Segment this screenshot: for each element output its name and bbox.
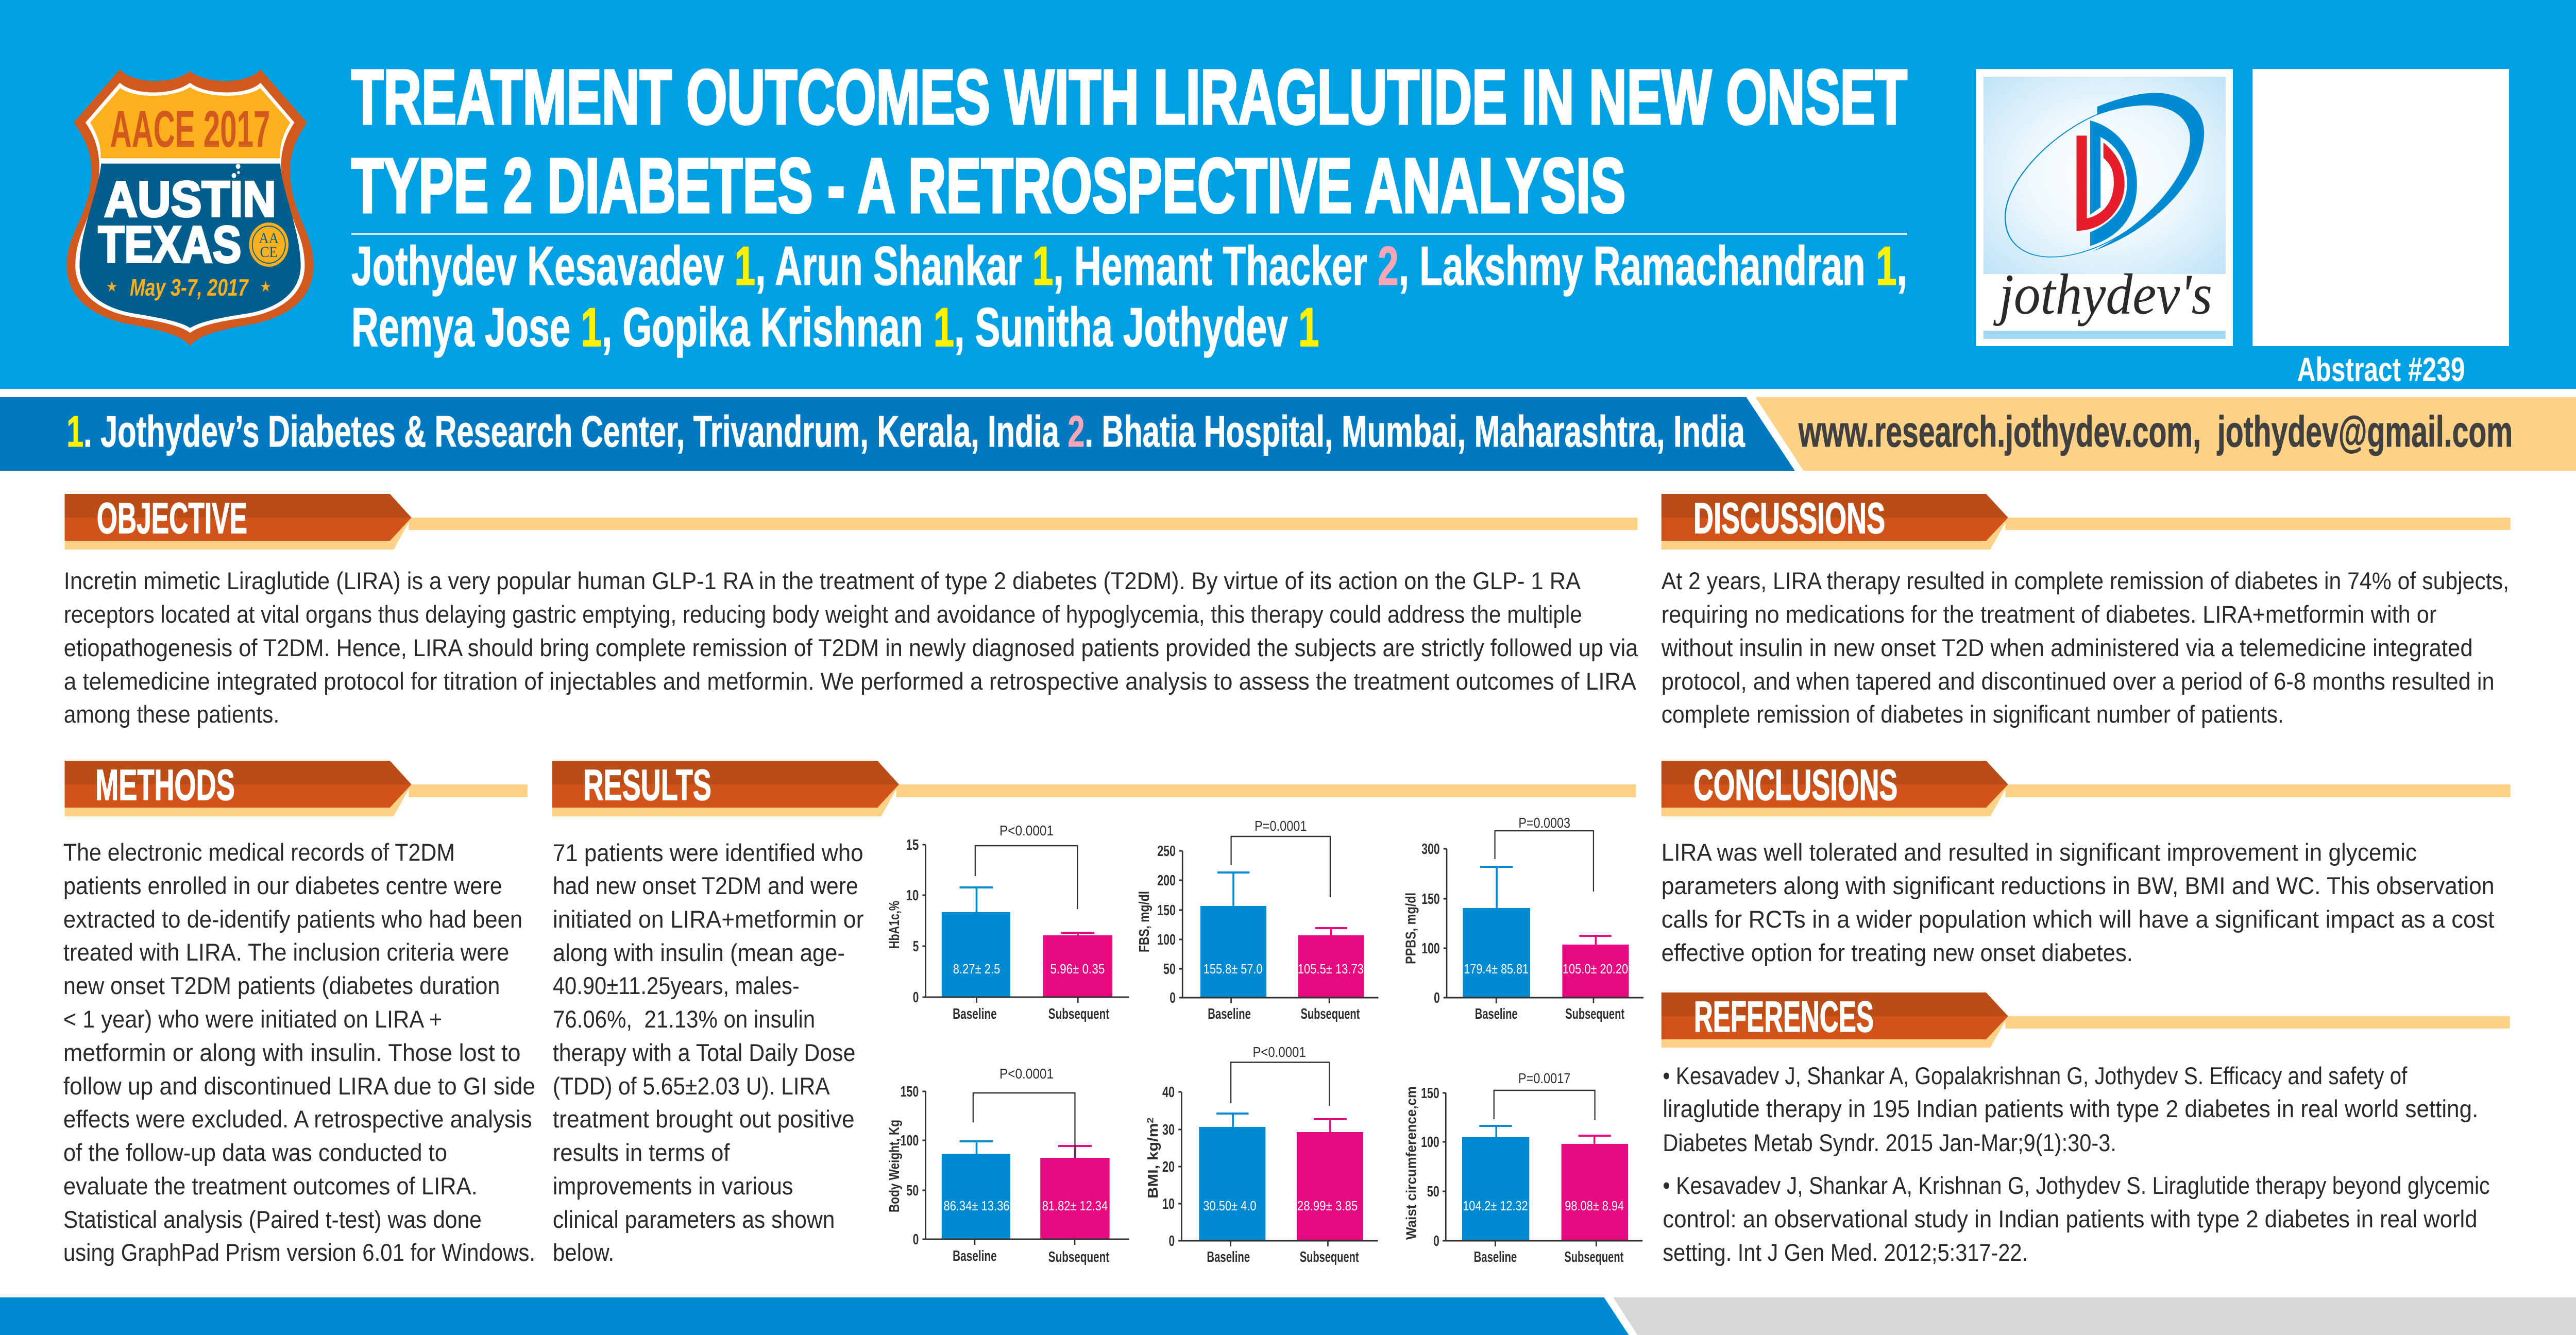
heading: conclusions [1662, 761, 2511, 816]
authors [351, 235, 1907, 358]
text: results [553, 840, 864, 1266]
text: discussions: requiring no medications for the treatment of diabetes. LIRA+metformin with or [1662, 602, 2437, 628]
chart: PPBS: 100 [1421, 940, 1440, 956]
icon: Jothydev's logo: jothydev's [1993, 263, 2212, 326]
title [351, 54, 1907, 229]
authors: Remya Jose 1, Gopika Krishnan 1, Sunitha Jothydev 1 [351, 297, 1319, 358]
text: references: liraglutide therapy in 195 Indian patients with type 2 diabetes in real world setting. [1663, 1096, 2478, 1123]
chart: HbA1c [887, 823, 1129, 1022]
chart: BMI: 30.50± 4.0 [1203, 1199, 1257, 1213]
chart: FBS: 150 [1157, 902, 1176, 918]
text: results: initiated on LIRA+metformin or [553, 906, 864, 933]
text: methods: < 1 year) who were initiated on LIRA + [63, 1006, 442, 1033]
abstract number: Abstract #239 [2297, 351, 2465, 389]
text: methods: of the follow-up data was conducted to [63, 1140, 447, 1167]
chart: waist circumference: Baseline [1474, 1248, 1517, 1265]
heading: conclusions: CONCLUSIONS [1693, 761, 1897, 809]
text: methods [63, 840, 535, 1266]
text: methods: The electronic medical records of T2DM [63, 840, 455, 866]
text: discussions: At 2 years, LIRA therapy resulted in complete remission of diabetes in 74% of subjects, [1662, 568, 2509, 595]
text: discussions [1661, 568, 2509, 728]
chart: PPBS: PPBS, mg/dl [1403, 893, 1419, 964]
heading: objective [65, 494, 1637, 550]
chart: HbA1c: P<0.0001 [999, 823, 1054, 838]
header background [0, 0, 2576, 389]
chart: waist circumference: P=0.0017 [1518, 1070, 1570, 1086]
chart: BMI: 30 [1162, 1121, 1175, 1138]
text: results: had new onset T2DM and were [553, 873, 858, 900]
text: references: Diabetes Metab Syndr. 2015 Jan-Mar;9(1):30-3. [1663, 1130, 2116, 1157]
heading: methods: METHODS [95, 761, 235, 809]
text: methods: effects were excluded. A retrospective analysis [63, 1106, 532, 1133]
text: discussions: complete remission of diabetes in significant number of patients. [1662, 701, 2284, 728]
chart: BMI: 10 [1162, 1195, 1175, 1212]
chart: body weight: 86.34± 13.36 [943, 1199, 1010, 1213]
text: methods: patients enrolled in our diabetes centre were [63, 873, 502, 900]
icon: AACE 2017 Austin Texas shield logo: AA [259, 230, 279, 247]
heading: references: REFERENCES [1694, 992, 1874, 1041]
text: methods: Statistical analysis (Paired t-test) was done [63, 1207, 482, 1234]
chart: FBS: Subsequent [1300, 1005, 1360, 1022]
chart: PPBS: 179.4± 85.81 [1464, 962, 1529, 977]
chart: body weight: Subsequent [1048, 1248, 1109, 1265]
chart: FBS: 105.5± 13.73 [1298, 962, 1364, 977]
authors: Jothydev Kesavadev 1, Arun Shankar 1, Hemant Thacker 2, Lakshmy Ramachandran 1, [351, 235, 1907, 297]
chart: PPBS: P=0.0003 [1518, 815, 1570, 831]
chart: waist circumference: Waist circumference,cm [1403, 1086, 1419, 1240]
heading: results [552, 761, 1636, 816]
chart: HbA1c: 5 [913, 938, 919, 954]
chart: FBS: 100 [1157, 931, 1176, 948]
heading: results: RESULTS [583, 761, 711, 809]
chart: PPBS: Baseline [1475, 1005, 1518, 1022]
chart: waist circumference: 150 [1421, 1085, 1439, 1101]
chart: BMI: Baseline [1207, 1248, 1250, 1265]
text: results: (TDD) of 5.65±2.03 U). LIRA [553, 1073, 830, 1100]
text: results: clinical parameters as shown [553, 1207, 835, 1234]
chart: HbA1c: Baseline [953, 1005, 997, 1022]
chart: body weight [887, 1066, 1129, 1265]
text: results: results in terms of [553, 1140, 730, 1167]
chart: FBS: 250 [1157, 843, 1176, 859]
text: references [1663, 1063, 2490, 1266]
chart: body weight: P<0.0001 [999, 1066, 1054, 1082]
chart: BMI [1145, 1044, 1378, 1265]
title: TREATMENT OUTCOMES WITH LIRAGLUTIDE IN NEW ONSET [351, 54, 1907, 141]
text: methods: metformin or along with insulin. Those lost to [63, 1040, 521, 1067]
heading: discussions: DISCUSSIONS [1693, 494, 1885, 542]
chart: PPBS: 300 [1421, 841, 1440, 857]
text: objective: etiopathogenesis of T2DM. Hence, LIRA should bring complete remission of T2DM in newly diagnosed patients provided the subjects are strictly followed up via [64, 635, 1638, 662]
text: methods: new onset T2DM patients (diabetes duration [63, 973, 500, 1000]
contact band [1755, 397, 2576, 471]
text: results: 40.90±11.25years, males- [553, 973, 800, 1000]
text: conclusions: calls for RCTs in a wider population which will have a significant impact as a cost [1662, 906, 2495, 933]
chart: FBS: 0 [1170, 989, 1176, 1006]
text: objective: receptors located at vital organs thus delaying gastric emptying, reducing body weight and avoidance of hypoglycemia, this therapy could address the multiple [64, 602, 1582, 628]
footer band [0, 1297, 2576, 1335]
text: references: setting. Int J Gen Med. 2012;5:317-22. [1663, 1240, 2028, 1266]
text: results: below. [553, 1240, 614, 1266]
chart: FBS [1137, 818, 1378, 1022]
chart: BMI: 40 [1162, 1084, 1175, 1100]
text: methods: extracted to de-identify patients who had been [63, 906, 522, 933]
chart: PPBS [1403, 815, 1643, 1022]
chart: HbA1c: HbA1c,% [887, 901, 903, 949]
chart: body weight: 0 [913, 1231, 919, 1247]
icon: AACE 2017 Austin Texas shield logo: AUSTIN [104, 172, 276, 227]
text: methods: follow up and discontinued LIRA due to GI side [63, 1073, 535, 1100]
text: results: 76.06%, 21.13% on insulin [553, 1006, 815, 1033]
heading: methods [65, 761, 528, 816]
chart: body weight: 150 [901, 1083, 919, 1100]
text: methods: using GraphPad Prism version 6.01 for Windows. [63, 1240, 535, 1266]
white logo placeholder box [2252, 69, 2509, 346]
icon: AACE 2017 Austin Texas shield logo: ★ [106, 279, 117, 295]
chart: waist circumference: 0 [1433, 1233, 1439, 1249]
chart: body weight: Baseline [953, 1247, 997, 1264]
text: methods: evaluate the treatment outcomes of LIRA. [63, 1173, 478, 1200]
chart: body weight: Body Weight, Kg [887, 1120, 903, 1212]
chart: HbA1c: 8.27± 2.5 [953, 962, 1000, 977]
text: objective: Incretin mimetic Liraglutide (LIRA) is a very popular human GLP-1 RA in the treatment of type 2 diabetes (T2DM). By virtue of its action on the GLP- 1 RA [64, 568, 1581, 595]
chart: PPBS: 105.0± 20.20 [1563, 962, 1628, 977]
text: references: control: an observational study in Indian patients with type 2 diabetes in real world [1663, 1206, 2478, 1233]
text: results: treatment brought out positive [553, 1106, 855, 1133]
text: conclusions: effective option for treating new onset diabetes. [1662, 940, 2133, 967]
chart: body weight: 50 [906, 1182, 919, 1199]
icon: AACE 2017 Austin Texas shield logo: CE [260, 244, 278, 261]
icon: Jothydev's logo [1976, 69, 2233, 346]
chart: FBS: Baseline [1208, 1005, 1251, 1022]
chart: FBS: 200 [1157, 872, 1176, 888]
chart: HbA1c: 15 [906, 836, 919, 853]
affiliations band: 1. Jothydev’s Diabetes & Research Center, Trivandrum, Kerala, India 2. Bhatia Hospital, Mumbai, Maharashtra, India [66, 407, 1745, 456]
icon: AACE 2017 Austin Texas shield logo [66, 70, 314, 346]
text: discussions: protocol, and when tapered and discontinued over a period of 6-8 months resulted in [1662, 669, 2495, 695]
text: objective: a telemedicine integrated protocol for titration of injectables and metformin. We performed a retrospective analysis to assess the treatment outcomes of LIRA [64, 669, 1636, 695]
chart: PPBS: 0 [1434, 989, 1440, 1006]
heading: objective: OBJECTIVE [97, 494, 247, 542]
icon: AACE 2017 Austin Texas shield logo: TEXAS [98, 216, 241, 273]
text: conclusions: LIRA was well tolerated and resulted in significant improvement in glycemic [1662, 840, 2417, 866]
chart: body weight: 81.82± 12.34 [1042, 1199, 1108, 1213]
chart: BMI: 20 [1162, 1158, 1175, 1175]
chart: FBS: 155.8± 57.0 [1204, 962, 1263, 977]
chart: FBS: FBS, mg/dl [1137, 891, 1153, 952]
text: results: along with insulin (mean age- [553, 940, 845, 967]
chart: HbA1c: Subsequent [1048, 1005, 1109, 1022]
text: references: • Kesavadev J, Shankar A, Gopalakrishnan G, Jothydev S. Efficacy and safety of [1663, 1063, 2408, 1090]
chart: BMI: 2 [1145, 1118, 1156, 1123]
text: discussions: without insulin in new onset T2D when administered via a telemedicine integrated [1661, 635, 2473, 662]
chart: BMI: P<0.0001 [1252, 1044, 1306, 1060]
text: conclusions [1662, 840, 2495, 967]
title: TYPE 2 DIABETES - A RETROSPECTIVE ANALYSIS [351, 143, 1625, 229]
text: methods: treated with LIRA. The inclusion criteria were [63, 939, 509, 966]
chart: FBS: P=0.0001 [1255, 818, 1307, 834]
chart: HbA1c: 10 [906, 887, 919, 903]
icon: AACE 2017 Austin Texas shield logo: ★ [260, 279, 272, 295]
chart: waist circumference: 98.08± 8.94 [1565, 1199, 1624, 1213]
chart: HbA1c: 5.96± 0.35 [1050, 962, 1105, 977]
chart: waist circumference: Subsequent [1564, 1248, 1623, 1265]
icon: AACE 2017 Austin Texas shield logo: May 3-7, 2017 [130, 275, 249, 301]
icon: AACE 2017 Austin Texas shield logo: AACE 2017 [110, 100, 270, 158]
chart: PPBS: 150 [1421, 891, 1440, 907]
chart: BMI: 28.99± 3.85 [1297, 1199, 1358, 1213]
affiliations band [0, 397, 1795, 471]
text: results: 71 patients were identified who [553, 840, 863, 867]
text: conclusions: parameters along with significant reductions in BW, BMI and WC. This observation [1662, 873, 2495, 900]
text: objective [64, 568, 1638, 728]
chart: waist circumference: 104.2± 12.32 [1463, 1199, 1528, 1213]
chart: BMI: BMI, kg/m [1145, 1123, 1161, 1199]
chart: BMI: 0 [1169, 1233, 1175, 1249]
chart: body weight: 100 [901, 1132, 919, 1149]
chart: waist circumference: 50 [1427, 1183, 1439, 1200]
text: objective: among these patients. [64, 701, 279, 728]
chart: HbA1c: 0 [913, 989, 919, 1005]
chart: waist circumference [1403, 1070, 1642, 1265]
chart: PPBS: Subsequent [1565, 1005, 1624, 1022]
text: references: • Kesavadev J, Shankar A, Krishnan G, Jothydev S. Liraglutide therapy beyond glycemic [1663, 1173, 2490, 1200]
chart: waist circumference: 100 [1421, 1134, 1439, 1150]
chart: BMI: Subsequent [1300, 1248, 1359, 1265]
text: results: improvements in various [553, 1173, 793, 1200]
heading: references [1662, 992, 2510, 1048]
heading: discussions [1662, 494, 2511, 550]
text: results: therapy with a Total Daily Dose [553, 1040, 855, 1067]
chart: FBS: 50 [1163, 961, 1176, 977]
